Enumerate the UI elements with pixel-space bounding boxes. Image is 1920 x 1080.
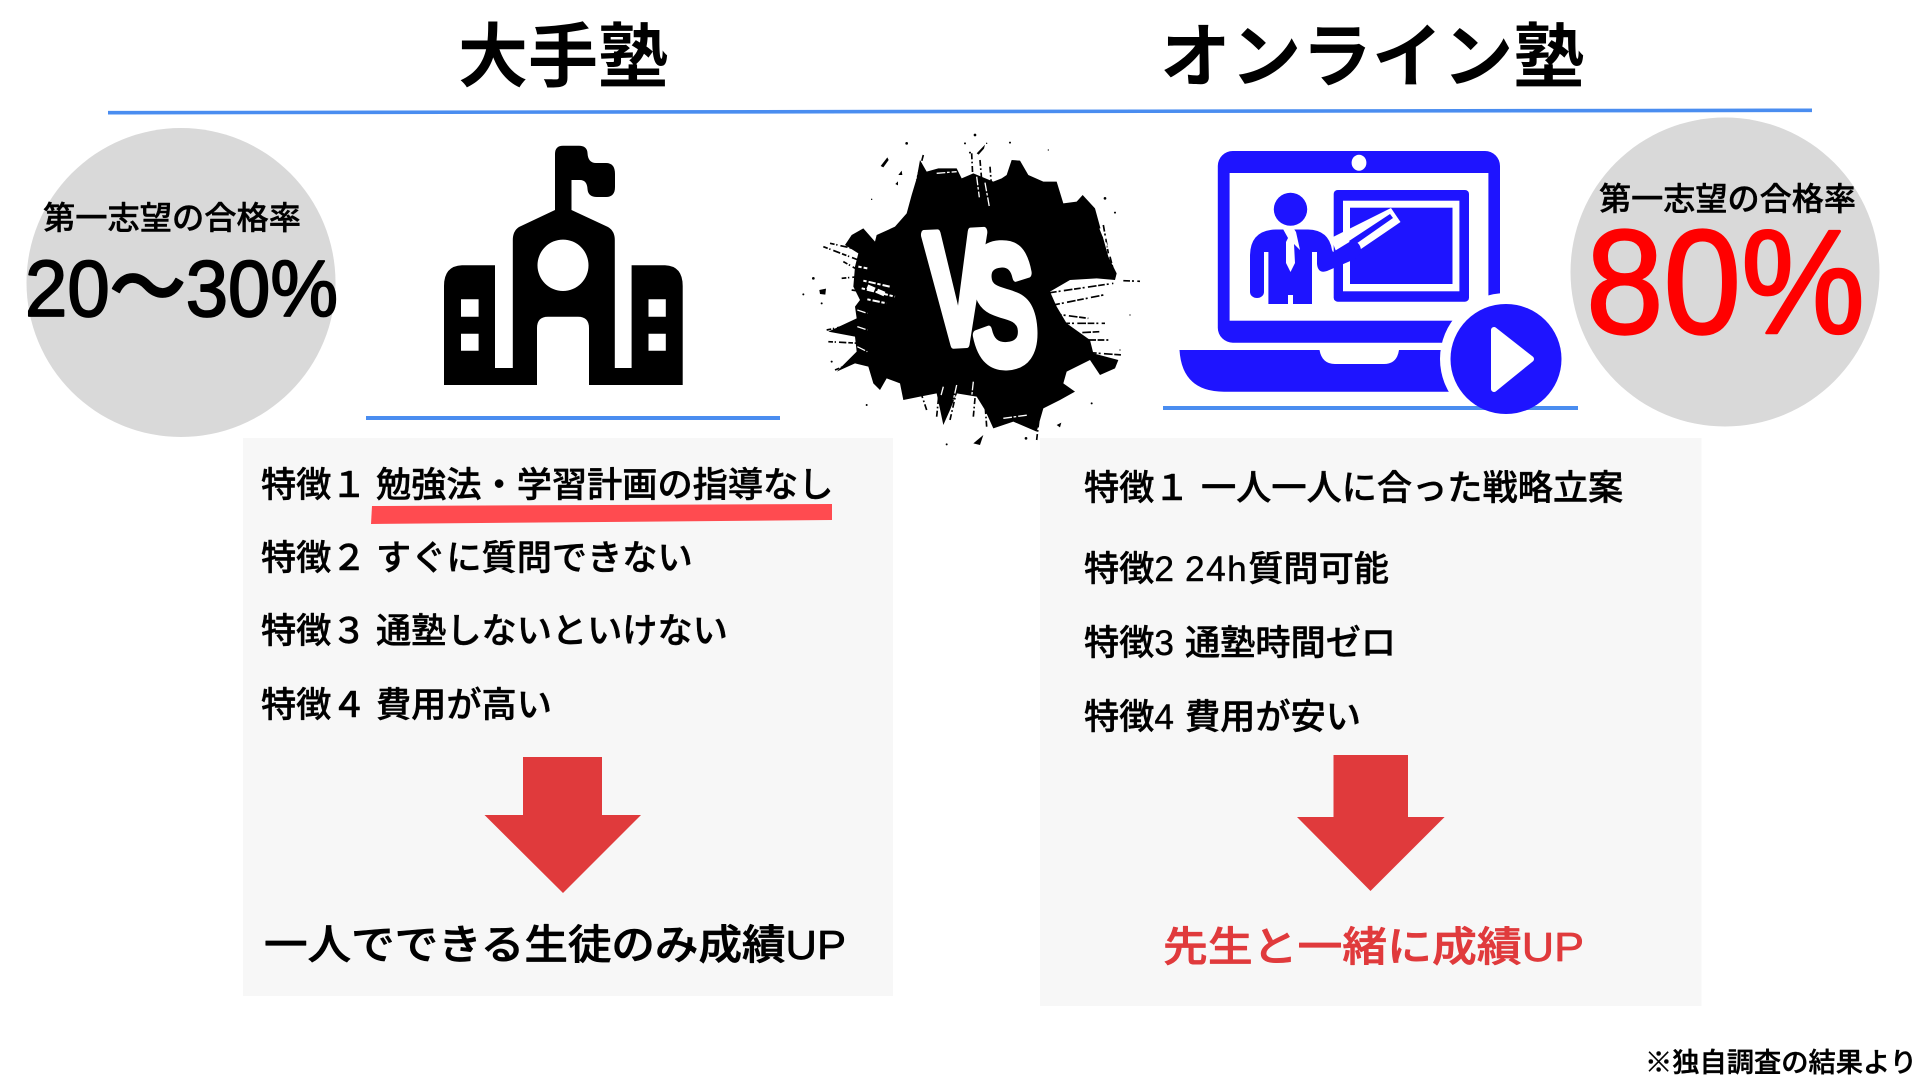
icon: laptop with teacher: [1180, 151, 1572, 425]
feature 4: 特徴４: [261, 686, 367, 725]
feature 2: 特徴2: [1084, 550, 1174, 589]
title: online cram school: オンライン塾: [1160, 18, 1584, 96]
conclusion: 先生と一緒に成績UP: [1163, 924, 1584, 970]
feature 4: 費用が安い: [1185, 698, 1361, 737]
arrow down: [1297, 755, 1445, 891]
panel: left pass rate circle: [25, 128, 338, 437]
icon: school building: [444, 146, 683, 385]
feature 1: 特徴１: [261, 466, 367, 505]
icon: play button: [1450, 304, 1562, 414]
right pass rate label: 第一志望の合格率: [1599, 181, 1856, 217]
feature 4: 費用が高い: [376, 686, 552, 725]
feature 3: 通塾時間ゼロ: [1185, 624, 1396, 663]
feature 2: 特徴２: [261, 539, 367, 578]
feature 1: 一人一人に合った戦略立案: [1201, 469, 1623, 508]
VS lettering: V: [921, 198, 993, 379]
footnote: ※独自調査の結果より: [1645, 1048, 1917, 1078]
feature 4: 特徴4: [1084, 698, 1174, 737]
icon: VS ink splatter badge: [802, 134, 1140, 445]
feature 2: 24h: [1185, 550, 1248, 589]
highlight underline: [371, 504, 832, 524]
feature 2: すぐに質問できない: [376, 539, 693, 578]
rough black dashed streaks: [823, 153, 1140, 440]
feature 3: 特徴3: [1084, 624, 1174, 663]
feature 2: 質問可能: [1248, 550, 1389, 589]
VS lettering: [921, 198, 1043, 403]
left pass rate label: 第一志望の合格率: [43, 200, 301, 236]
title: major cram school: 大手塾: [458, 18, 668, 96]
feature 1: 特徴１: [1084, 469, 1190, 508]
left pass rate value: 20〜30%: [25, 244, 338, 333]
feature 1: 勉強法・学習計画の指導なし: [376, 466, 833, 505]
panel: right pass rate circle: [1570, 118, 1880, 426]
panel: major cram school features: [243, 438, 893, 996]
right pass rate value: 80%: [1586, 200, 1865, 365]
VS lettering: S: [964, 209, 1043, 403]
panel: online cram school features: [1040, 438, 1702, 1006]
arrow down: [484, 757, 641, 893]
feature 3: 通塾しないといけない: [376, 612, 728, 651]
conclusion: 一人でできる生徒のみ成績UP: [264, 922, 846, 968]
feature 3: 特徴３: [261, 612, 367, 651]
